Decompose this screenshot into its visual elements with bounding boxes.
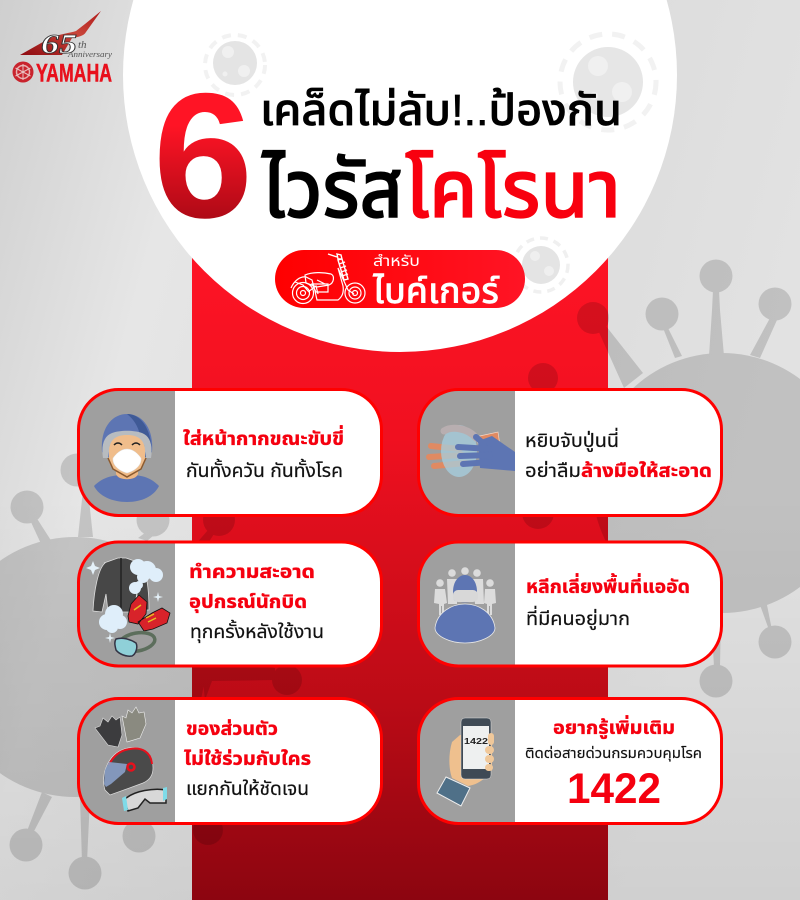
- logo: Yamaha 65th Anniversary: [12, 11, 112, 88]
- logo: Yamaha 65th Anniversary: th: [78, 39, 87, 51]
- text: clean heading 1: ทำความสะอาด: [189, 562, 315, 583]
- card 3: personal items: [78, 698, 382, 824]
- text: personal heading 2: ไม่ใช้ร่วมกับใคร: [184, 748, 311, 770]
- decorative virus top left: [205, 35, 265, 95]
- logo: Yamaha 65th Anniversary: Anniversary: [67, 50, 112, 59]
- card 1: wear a mask: [78, 390, 382, 516]
- card 5: avoid crowds: [418, 542, 722, 666]
- text: personal heading 1: ของส่วนตัว: [186, 718, 278, 740]
- title line 2: ไวรัส: [261, 145, 403, 234]
- text: wash line 2: [525, 459, 712, 482]
- text: hotline sub: ติดต่อสายด่วนกรมควบคุมโรค: [525, 745, 702, 762]
- icon: jacket, gloves and goggles: [86, 558, 170, 656]
- decorative virus bottom: [514, 238, 568, 292]
- text: clean heading 2: อุปกรณ์นักบิด: [189, 592, 307, 613]
- pill label small: สำหรับ: [373, 253, 420, 270]
- icon: hand holding phone: 1422: [464, 736, 488, 746]
- virus silhouette left: [0, 454, 302, 890]
- card 4: wash hands: [418, 390, 722, 516]
- decorative virus top right: [560, 34, 656, 130]
- text: personal sub: แยกกันให้ชัดเจน: [186, 777, 309, 800]
- text: hotline number: 1422: [567, 765, 661, 813]
- icon: gloves, helmet and goggles: [95, 707, 167, 811]
- text: hotline heading: อยากรู้เพิ่มเติม: [553, 715, 675, 739]
- icon: washing hands: [429, 425, 515, 477]
- title line 1: เคล็ดไม่ลับ!..ป้องกัน: [260, 86, 622, 135]
- pill: for bikers: [275, 250, 525, 311]
- text: crowd heading: หลีกเลี่ยงพื้นที่แออัด: [526, 573, 690, 598]
- title line 2: [261, 145, 621, 234]
- white title circle: [123, 0, 677, 352]
- icon: masked rider: [94, 414, 159, 502]
- card 6: hotline: [418, 698, 722, 824]
- title line 2: โคโรนา: [405, 145, 621, 234]
- icon: scooter: [291, 254, 365, 304]
- red centre band: [192, 240, 608, 900]
- text: mask sub: กันทั้งควัน กันทั้งโรค: [186, 458, 343, 482]
- text: mask heading: ใส่หน้ากากขณะขับขี่: [183, 425, 344, 450]
- card 2: clean gear: [78, 542, 382, 666]
- title number 6: 6: [153, 56, 253, 255]
- logo: Yamaha 65th Anniversary: YAMAHA: [36, 60, 112, 88]
- logo: Yamaha 65th Anniversary: 65: [41, 29, 77, 59]
- text: clean sub: ทุกครั้งหลังใช้งาน: [190, 619, 324, 643]
- virus silhouette right: [522, 260, 800, 698]
- pill label large: ไบค์เกอร์: [372, 270, 500, 311]
- text: crowd sub: ที่มีคนอยู่มาก: [526, 605, 630, 631]
- icon: crowd: [434, 567, 496, 643]
- text: wash line 2: อย่าลืม: [525, 459, 581, 482]
- text: wash line 2: ล้างมือให้สะอาด: [581, 460, 712, 482]
- text: wash line 1: หยิบจับปู่นนี่: [525, 427, 619, 453]
- icon: hand holding phone: [437, 718, 494, 806]
